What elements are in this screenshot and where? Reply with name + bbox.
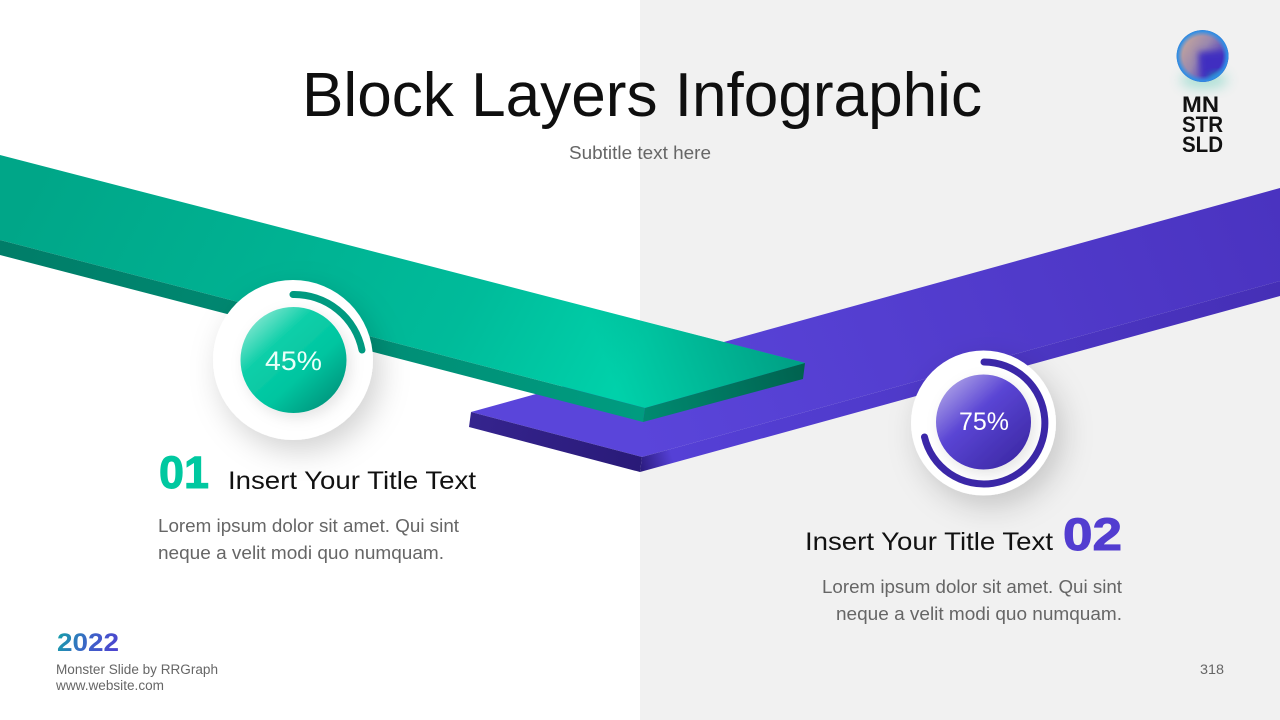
body 01: Lorem ipsum dolor sit amet. Qui sint	[158, 515, 459, 536]
page number: 318	[1200, 661, 1224, 677]
footer credits	[55, 662, 218, 693]
gauge arc 45 percent	[293, 294, 362, 350]
logo	[1176, 30, 1234, 157]
title: Block Layers Infographic	[302, 61, 982, 130]
logo wordmark	[1182, 92, 1223, 157]
green block top face	[0, 155, 805, 408]
purple block right side face	[640, 281, 1280, 472]
gauge: 45 percent	[213, 280, 373, 440]
body 02	[822, 576, 1122, 624]
number 02: 02	[1063, 509, 1122, 560]
gauge arc 75 percent	[924, 362, 1045, 484]
green layer block	[0, 155, 805, 422]
text block 01	[158, 447, 476, 563]
gauge: 75 percent	[911, 350, 1056, 496]
footer year: 2022	[57, 629, 119, 657]
green block front side face	[0, 240, 645, 422]
logo sphere	[1176, 30, 1234, 89]
footer	[55, 629, 218, 693]
logo wordmark: SLD	[1182, 132, 1223, 157]
logo wordmark: STR	[1182, 112, 1223, 137]
body 01	[158, 515, 459, 563]
number 01: 01	[159, 447, 209, 498]
subtitle: Subtitle text here	[569, 143, 711, 163]
gauge value 45%: 45%	[265, 346, 322, 376]
heading 02: Insert Your Title Text	[805, 528, 1053, 556]
purple block left side face	[469, 412, 642, 472]
gauge inner disc purple	[936, 374, 1031, 470]
logo wordmark: MN	[1182, 92, 1219, 117]
gauge inner disc green	[240, 307, 346, 413]
body 01: neque a velit modi quo numquam.	[158, 542, 444, 563]
body 02: neque a velit modi quo numquam.	[836, 603, 1122, 624]
footer credits: www.website.com	[55, 678, 164, 693]
heading 01: Insert Your Title Text	[228, 467, 476, 495]
purple block top face	[471, 188, 1280, 457]
green block right side face	[643, 363, 805, 422]
text block 02	[805, 509, 1122, 624]
footer credits: Monster Slide by RRGraph	[56, 662, 218, 677]
purple layer block	[469, 188, 1280, 472]
gauge value 75%: 75%	[959, 408, 1009, 436]
body 02: Lorem ipsum dolor sit amet. Qui sint	[822, 576, 1122, 597]
